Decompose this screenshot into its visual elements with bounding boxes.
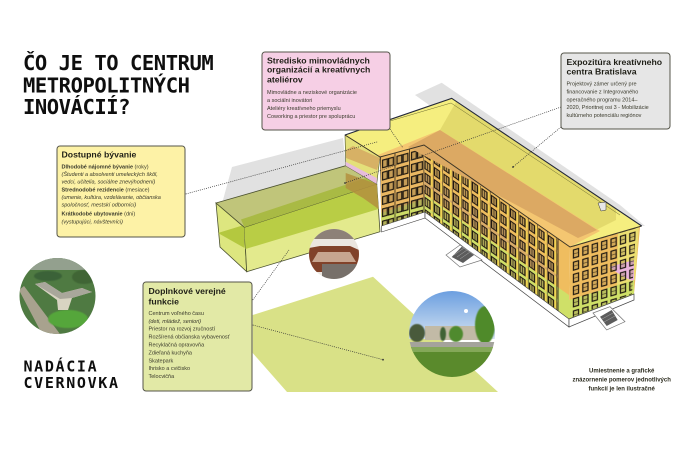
illustrative note: Umiestnenie a grafické [589, 368, 655, 374]
text block: project description: kultúrneho potenciálu regiónov [566, 113, 642, 119]
text block: studio functions: Ateliéry kreatívneho priemyslu [267, 106, 341, 112]
heading: NGOs and creative studios [267, 55, 370, 84]
heading: creative centre branch: Expozitúra kreatívneho [566, 57, 662, 67]
text block: public functions list: Skatepark [148, 358, 174, 364]
text block: housing types: (vystupujúci, návštevníci) [62, 219, 123, 225]
illustrative note: funkcií je len ilustračné [589, 387, 656, 393]
text block: public functions list: Ihrisko a cvičisko [148, 366, 190, 372]
text block: project description: operačného programu 2014– [566, 97, 638, 103]
text block: public functions list: Centrum voľného času [148, 311, 204, 317]
heading: public functions [148, 286, 226, 306]
heading: public functions: Doplnkové verejné [148, 286, 226, 296]
building axonometric [216, 98, 642, 330]
heading: creative centre branch: centra Bratislava [566, 66, 637, 76]
long wall [424, 145, 570, 327]
title: INOVÁCIÍ? [23, 94, 130, 119]
panel: NGOs and creative studios [262, 52, 390, 130]
text block: project description [566, 82, 649, 119]
text block: public functions list: Recyklačná opravovňa [148, 343, 205, 349]
title: ČO JE TO CENTRUM [23, 50, 213, 75]
text block: public functions list: Priestor na rozvoj zručností [148, 327, 216, 333]
interior photo [309, 229, 359, 279]
text block: studio functions [267, 90, 357, 120]
short wall [380, 145, 425, 232]
heading: creative centre branch [566, 57, 662, 76]
text block: housing types [62, 164, 161, 225]
stairs [446, 245, 625, 330]
text block: housing types: Strednodobé rezidencie (mesiace) [62, 187, 150, 193]
heading: NGOs and creative studios: organizácií a kreatívnych [267, 65, 370, 75]
text block: housing types: (umenie, kultúra, vzdelávanie, občianska [62, 195, 161, 201]
text block: project description: 2020, Prioritnej osi 3 - Mobilizácie [566, 105, 649, 111]
text block: public functions list: Telocvičňa [148, 374, 175, 380]
illustrative note [573, 368, 671, 393]
heading: public functions: funkcie [148, 296, 179, 306]
panel: public functions [143, 282, 252, 391]
logo: Nadácia Cvernovka: CVERNOVKA [24, 374, 120, 392]
lawn plot [253, 277, 498, 392]
roof [345, 98, 642, 247]
text block: public functions list: (deti, mládež, seniori) [148, 319, 201, 325]
title: METROPOLITNÝCH [23, 72, 190, 98]
illustrative note: znázornenie pomerov jednotlivých [573, 378, 671, 384]
text block: studio functions: Coworking a priestor pre spoluprácu [267, 114, 355, 120]
heading: affordable housing: Dostupné bývanie [62, 150, 136, 160]
text block: studio functions: a sociálni inovátori [267, 98, 312, 104]
connecting wall [345, 135, 380, 184]
heading: NGOs and creative studios: ateliérov [267, 74, 303, 84]
text block: housing types: spoločnosť, mestskí odborníci) [62, 203, 136, 209]
logo: Nadácia Cvernovka: NADÁCIA [24, 356, 98, 376]
text block: project description: Projektový zámer určený pre [566, 82, 636, 88]
text block: public functions list: Rozšírená občianska vybavenosť [148, 335, 231, 341]
heading: NGOs and creative studios: Stredisko mimovládnych [267, 55, 370, 65]
end wall [569, 227, 640, 327]
text block: housing types: Dlhodobé nájomné bývanie (roky) [62, 164, 149, 170]
panel: creative centre branch [561, 53, 670, 129]
text block: housing types: (Študenti a absolventi umeleckých škôl, [62, 171, 158, 178]
text block: housing types: Krátkodobé ubytovanie (dni) [62, 211, 135, 217]
building shadows [223, 83, 645, 226]
lawn photo [409, 291, 495, 379]
text block: housing types: vedci, učitelia, sociálne znevýhodnení) [62, 180, 156, 186]
text block: public functions list: Zdieľaná kuchyňa [148, 350, 193, 356]
text block: public functions list [148, 311, 231, 380]
panel: affordable housing [57, 146, 185, 237]
text block: studio functions: Mimovládne a neziskové organizácie [267, 90, 357, 96]
text block: project description: financovanie z Integrovaného [566, 90, 638, 96]
aerial photo [19, 258, 96, 334]
logo: Nadácia Cvernovka [24, 356, 120, 392]
annex volume [216, 166, 380, 272]
leader lines [186, 107, 561, 361]
title [23, 50, 213, 119]
